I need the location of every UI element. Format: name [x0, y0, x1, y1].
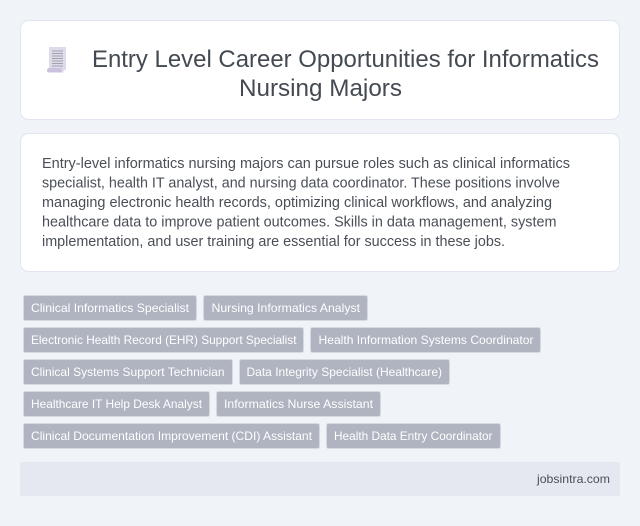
tag: Clinical Documentation Improvement (CDI) Assistant: Clinical Documentation Improvement (CDI) Assistant	[31, 429, 313, 443]
description text: managing electronic health records, optimizing clinical workflows, and analyzing	[42, 195, 552, 211]
description text: specialist, health IT analyst, and nursing data coordinator. These positions involve	[42, 176, 560, 192]
description text	[42, 156, 570, 250]
tag: Clinical Documentation Improvement (CDI) Assistant	[24, 424, 320, 448]
tag: Data Integrity Specialist (Healthcare): Data Integrity Specialist (Healthcare)	[246, 365, 442, 379]
tag: Clinical Informatics Specialist: Clinical Informatics Specialist	[31, 301, 190, 315]
footer source text: jobsintra.com	[536, 472, 610, 486]
tag: Clinical Systems Support Technician	[24, 360, 232, 384]
description text: healthcare data to improve patient outcomes. Skills in data management, system	[42, 214, 557, 230]
tag: Nursing Informatics Analyst: Nursing Informatics Analyst	[212, 301, 361, 315]
footer bar	[20, 462, 620, 496]
tag: Informatics Nurse Assistant: Informatics Nurse Assistant	[224, 397, 374, 411]
tag: Health Data Entry Coordinator: Health Data Entry Coordinator	[334, 429, 492, 443]
tag: Clinical Informatics Specialist	[24, 296, 196, 320]
tag: Healthcare IT Help Desk Analyst	[24, 392, 210, 416]
tag: Healthcare IT Help Desk Analyst: Healthcare IT Help Desk Analyst	[31, 397, 203, 411]
title: Nursing Majors	[239, 75, 402, 102]
description panel	[20, 134, 620, 272]
tag: Health Information Systems Coordinator: Health Information Systems Coordinator	[318, 333, 534, 347]
tag: Health Information Systems Coordinator	[310, 328, 540, 352]
description text: implementation, and user training are essential for success in these jobs.	[42, 234, 505, 250]
tag: Electronic Health Record (EHR) Support Specialist	[24, 328, 304, 352]
tag: Data Integrity Specialist (Healthcare)	[240, 360, 450, 384]
header panel	[20, 20, 620, 120]
tag: Informatics Nurse Assistant	[216, 392, 380, 416]
title	[92, 46, 599, 102]
tag: Health Data Entry Coordinator	[326, 424, 500, 448]
description text: Entry-level informatics nursing majors can pursue roles such as clinical informatics	[42, 156, 570, 172]
job tags	[24, 296, 540, 448]
icon: document scroll	[47, 47, 66, 72]
tag: Clinical Systems Support Technician: Clinical Systems Support Technician	[31, 365, 224, 379]
title: Entry Level Career Opportunities for Informatics	[92, 46, 599, 73]
tag: Nursing Informatics Analyst	[204, 296, 368, 320]
tag: Electronic Health Record (EHR) Support Specialist: Electronic Health Record (EHR) Support Specialist	[31, 333, 297, 347]
